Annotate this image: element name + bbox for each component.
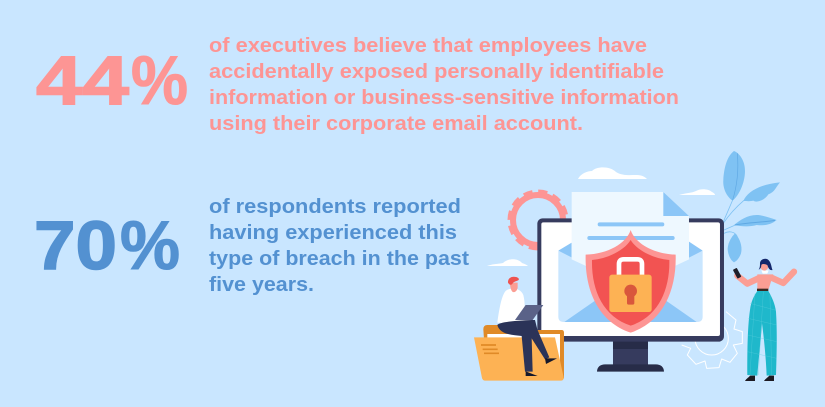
icon: pink gear	[510, 192, 566, 248]
trouser plaid	[747, 292, 777, 375]
torso	[497, 289, 535, 323]
head	[760, 261, 768, 271]
phone	[733, 268, 741, 279]
folder	[474, 325, 564, 381]
torso	[757, 274, 773, 289]
collar	[761, 270, 769, 274]
plant: leaves	[723, 151, 780, 262]
hair	[508, 277, 519, 285]
shoes	[745, 376, 774, 381]
stat: 70%: %	[120, 207, 180, 284]
stat: 44%: %	[131, 42, 188, 119]
text block: executives statement: accidentally exposed personally identifiable	[209, 61, 664, 83]
stat: 44%: 44	[36, 42, 129, 119]
text block: executives statement: using their corporate email account.	[209, 113, 583, 135]
text block: executives statement	[209, 35, 679, 135]
shoes	[526, 358, 557, 376]
cloud: left	[487, 259, 528, 266]
head	[510, 283, 518, 292]
arms	[737, 272, 794, 284]
text block: respondents statement: five years.	[209, 274, 314, 296]
hair	[759, 259, 773, 270]
monitor	[537, 192, 724, 372]
legs	[497, 320, 549, 372]
letter	[572, 192, 689, 287]
belt	[757, 289, 768, 291]
cloud: top	[578, 167, 647, 179]
woman with phone	[733, 259, 794, 381]
stat: 70%	[34, 207, 180, 284]
stat: 70%: 70	[34, 207, 117, 284]
trousers	[747, 291, 777, 376]
text block: respondents statement: having experienced this	[209, 222, 457, 244]
monitor frame	[537, 218, 724, 342]
shield with padlock	[586, 230, 676, 333]
monitor stand	[597, 341, 664, 372]
monitor screen	[541, 222, 720, 336]
text block: executives statement: information or business-sensitive information	[209, 87, 679, 109]
text block: respondents statement	[209, 196, 469, 296]
envelope back	[558, 242, 703, 322]
stat: 44%	[36, 42, 188, 119]
text block: executives statement: of executives believe that employees have	[209, 35, 647, 57]
text block: respondents statement: type of breach in the past	[209, 248, 469, 270]
icon: white outline gear	[682, 312, 742, 368]
laptop	[515, 305, 543, 320]
cloud: right	[679, 189, 715, 195]
text block: respondents statement: of respondents reported	[209, 196, 461, 218]
person with laptop	[497, 277, 557, 376]
